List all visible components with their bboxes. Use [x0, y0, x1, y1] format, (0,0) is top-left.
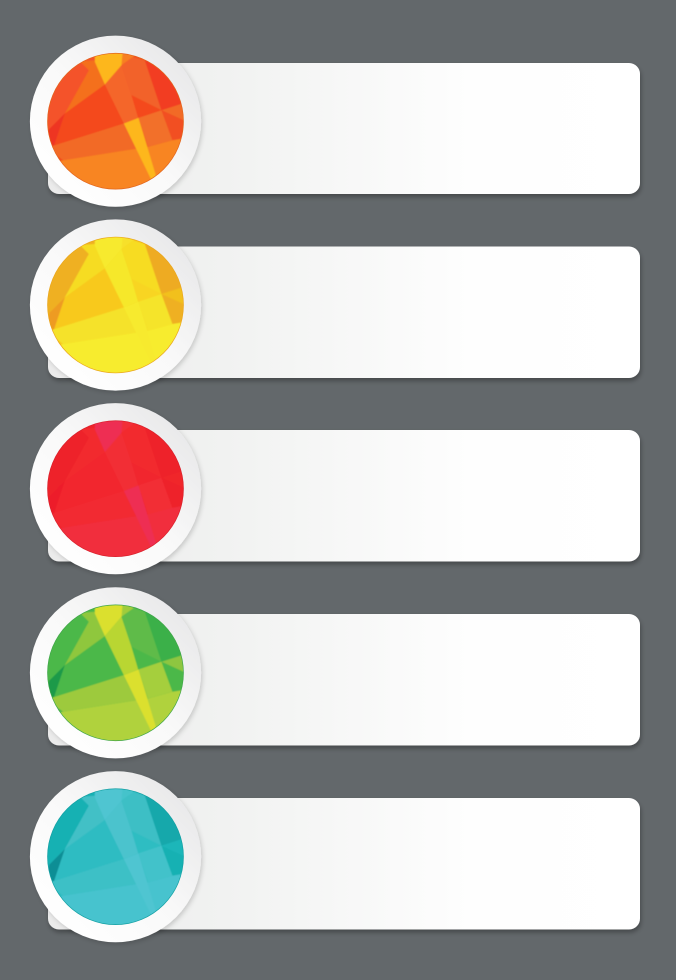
badge: green circle [30, 587, 201, 758]
panel: red row [30, 403, 640, 574]
card: yellow row [48, 246, 640, 378]
badge: orange circle [30, 36, 201, 207]
card: green row [48, 614, 640, 746]
card: orange row [48, 63, 640, 194]
panel: yellow row [30, 219, 640, 391]
badge: red circle [30, 403, 201, 574]
badge: teal circle [30, 771, 201, 942]
panel: teal row [30, 771, 640, 942]
panel: green row [30, 587, 640, 758]
badge: yellow circle [30, 219, 201, 391]
card: red row [48, 430, 640, 562]
card: teal row [48, 798, 640, 930]
panel: orange row [30, 36, 640, 207]
